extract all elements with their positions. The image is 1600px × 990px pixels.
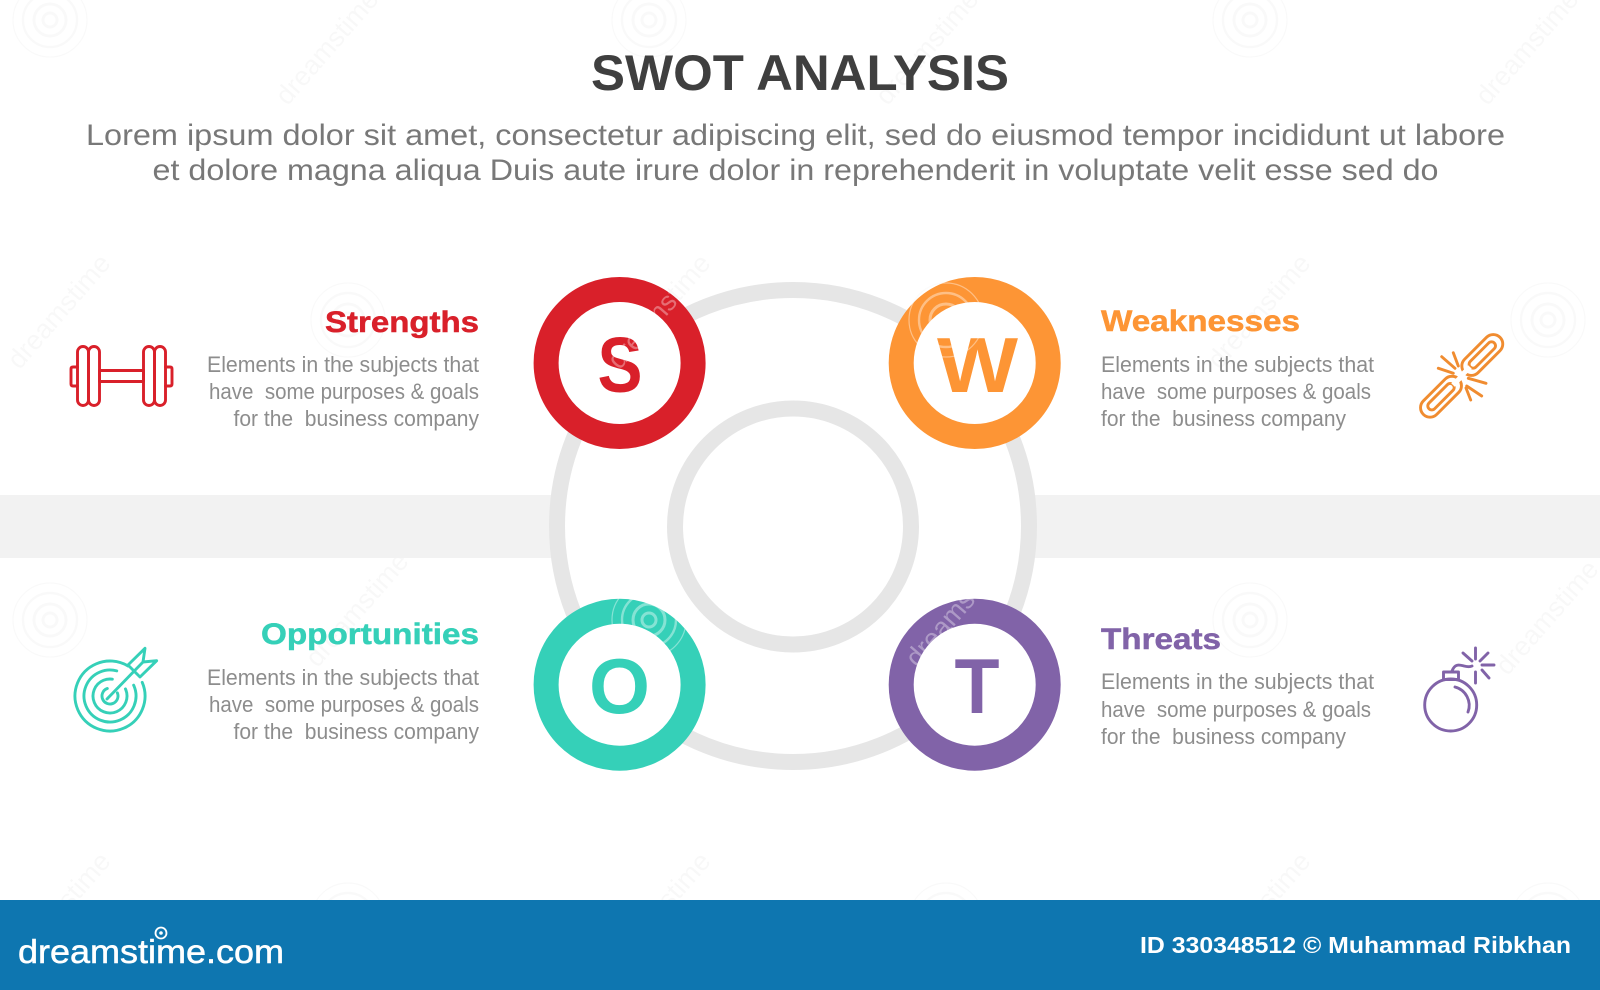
badge: S: S <box>598 320 642 408</box>
panel: strengths <box>71 306 479 431</box>
text block: weaknesses: for the business company <box>1101 406 1346 431</box>
text block: strengths <box>207 352 479 431</box>
text block: strengths: for the business company <box>234 406 479 431</box>
text block: threats: have some purposes & goals <box>1101 697 1371 722</box>
text block: opportunities <box>207 665 479 744</box>
footer bar <box>0 900 1600 990</box>
text block: opportunities: have some purposes & goals <box>209 692 479 717</box>
subtitle text: et dolore magna aliqua Duis aute irure dolor in reprehenderit in voluptate velit esse sed do <box>152 154 1438 187</box>
watermark layer: dreamstime <box>1201 846 1317 972</box>
text block: strengths: Elements in the subjects that <box>207 352 479 377</box>
icon: broken chain <box>1417 331 1507 421</box>
icon: bomb <box>1425 648 1494 731</box>
heading: opportunities: Opportunities <box>261 618 479 651</box>
watermark over badges <box>601 248 1015 672</box>
watermark layer: dreamstime <box>1 248 117 374</box>
heading: threats: Threats <box>1101 623 1221 656</box>
footer logo: dreamstime.com <box>18 933 284 970</box>
badge: S <box>546 290 693 436</box>
watermark over badges: dreamstime <box>899 546 1015 672</box>
watermark layer: dreamstime <box>1 846 117 972</box>
icon: target with arrow <box>64 648 157 742</box>
watermark layer: dreamstime <box>601 248 717 374</box>
text block: threats: Elements in the subjects that <box>1101 669 1374 694</box>
watermark layer: dreamstime <box>601 846 717 972</box>
text block: strengths: have some purposes & goals <box>209 379 479 404</box>
badge: T: T <box>954 642 1000 730</box>
text block: opportunities: Elements in the subjects that <box>207 665 479 690</box>
subtitle text: Lorem ipsum dolor sit amet, consectetur adipiscing elit, sed do eiusmod tempor incididunt ut labore <box>86 119 1505 152</box>
heading: strengths: Strengths <box>325 306 479 339</box>
watermark layer: dreamstime <box>899 546 1015 672</box>
panel: weaknesses <box>1101 305 1507 431</box>
badge: T <box>901 611 1048 758</box>
heading: weaknesses: Weaknesses <box>1101 305 1300 338</box>
badge: O: O <box>589 642 650 730</box>
text block: threats <box>1101 669 1374 749</box>
footer credit: ID 330348512 © Muhammad Ribkhan <box>1140 932 1571 958</box>
watermark layer: dreamstime <box>299 546 415 672</box>
watermark layer: dreamstime <box>1201 248 1317 374</box>
central ring diagram <box>557 290 1029 762</box>
panel: threats <box>1101 623 1494 749</box>
text block: threats: for the business company <box>1101 724 1346 749</box>
inner ring <box>675 408 911 644</box>
badge: O <box>546 611 693 758</box>
text block: opportunities: for the business company <box>234 719 479 744</box>
outer ring <box>557 290 1029 762</box>
subtitle text <box>86 119 1505 187</box>
icon: dumbbell <box>71 346 172 406</box>
badge: W <box>901 290 1048 436</box>
text block: weaknesses: have some purposes & goals <box>1101 379 1371 404</box>
watermark over badges: dreamstime <box>601 248 717 374</box>
title: SWOT ANALYSIS <box>591 45 1009 101</box>
text block: weaknesses <box>1101 352 1374 431</box>
text block: weaknesses: Elements in the subjects that <box>1101 352 1374 377</box>
badge: W: W <box>937 321 1018 409</box>
horizontal band <box>0 495 1600 558</box>
panel: opportunities <box>64 618 479 744</box>
